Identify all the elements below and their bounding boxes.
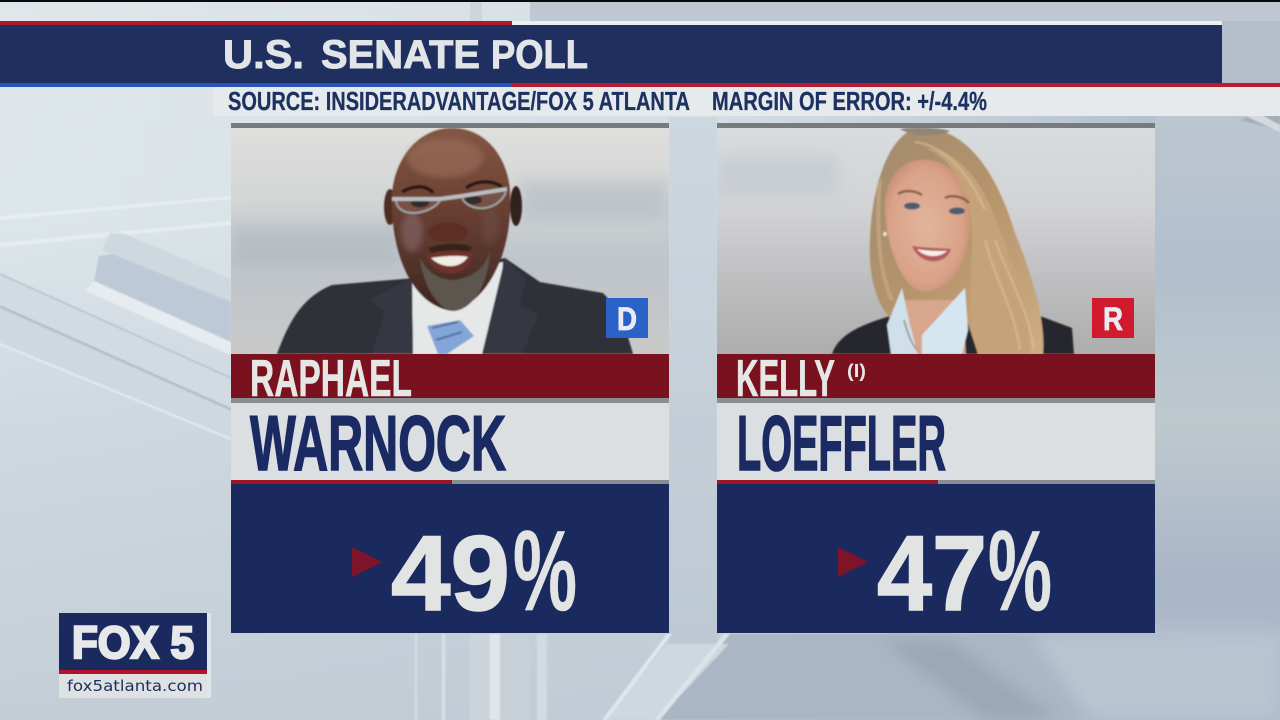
percent panel: 49 [391,513,510,633]
first name bar: RAPHAEL [250,350,412,408]
percent panel [717,484,1155,635]
panel: Loeffler [717,123,1155,635]
title: U.S. [223,33,304,77]
first name bar: (I) [847,361,866,381]
first name bar [717,350,1155,408]
badge: D: D [617,301,637,337]
centre gap and lower shapes [415,104,1280,720]
photo: Raphael Warnock [231,128,669,354]
badge: R [1092,298,1134,338]
source strip [213,86,1280,116]
header banner [0,21,1280,87]
title [223,33,588,77]
source text: SOURCE: INSIDERADVANTAGE/FOX 5 ATLANTA [228,86,690,116]
title: POLL [491,33,588,77]
percent panel: % [513,508,577,635]
panel: Warnock [231,123,669,635]
logo: FOX 5 [59,613,211,698]
badge: R: R [1103,301,1123,337]
left diagonal bars [0,196,231,440]
badge: D [606,298,648,338]
last name bar: WARNOCK [250,399,506,487]
website: fox5atlanta.com [67,677,203,695]
progress line [717,480,1155,484]
last name bar: LOEFFLER [737,399,946,487]
first name bar [231,350,669,408]
title: SENATE [321,33,480,77]
percent panel: % [988,508,1052,635]
progress line [231,480,669,484]
percent panel: 47 [877,513,987,633]
first name bar: KELLY [736,350,835,408]
logo: FOX 5: FOX 5 [72,617,194,668]
percent panel [231,484,669,635]
margin of error: MARGIN OF ERROR: +/-4.4% [712,86,987,116]
photo: Kelly Loeffler [717,128,1155,354]
